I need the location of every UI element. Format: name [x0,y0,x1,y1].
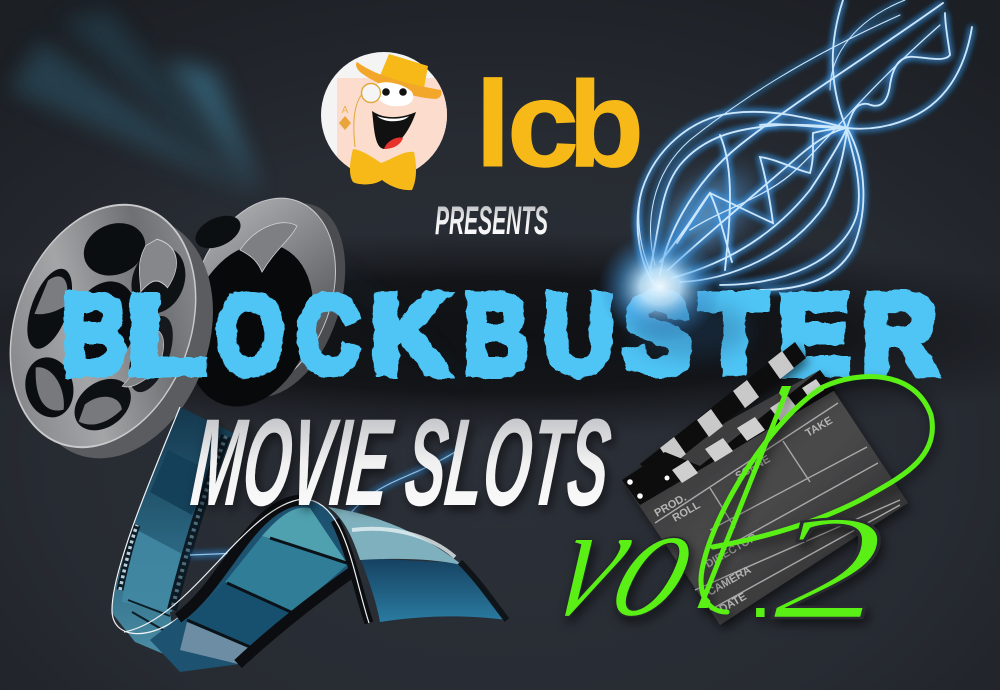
title: blockbuster: S [624,272,692,397]
film strip curled panel [360,558,507,622]
clapper labels: SCENE [734,453,772,483]
clapper labels: TAKE [804,415,835,440]
title: blockbuster: E [778,272,850,397]
title: blockbuster: C [297,272,359,397]
swirl source flare [598,231,750,358]
numeral 2: 2 [772,485,884,651]
clapper slate lines [655,403,900,610]
title: blockbuster [62,272,937,397]
clapper labels: DATE [718,591,749,616]
vol.2 green script [528,323,932,677]
clapper labels: DIRECTOR [704,532,759,571]
clapper labels [652,415,835,616]
title: blockbuster: B [464,272,529,397]
mascot badge [321,52,450,190]
letter l: l [669,323,815,677]
title: blockbuster: B [62,272,127,397]
clapper top arm [622,342,835,505]
card letter A: A [342,105,349,116]
clapper labels: PROD. [652,492,689,520]
title: blockbuster: U [544,272,614,397]
clapper labels: ROLL [670,499,703,525]
clapperboard [622,342,908,625]
film strip wave [124,499,507,672]
clapper labels: CAMERA [706,564,753,599]
title: blockbuster: T [701,272,767,397]
logo: lcb [321,52,644,192]
wordmark lcb: l [475,56,511,192]
front film reel [0,179,245,485]
letters v o: vo [528,469,730,652]
title: blockbuster: K [371,272,449,397]
title: blockbuster: R [862,272,937,397]
wordmark lcb: c [507,56,579,192]
blue light streak behind film [190,452,455,555]
back film reel [165,178,368,424]
film strip vertical loop [112,407,233,660]
bow tie [350,149,416,190]
projector light beams [10,10,480,400]
l swash loop [701,377,932,612]
presents label: PRESENTS [435,199,548,243]
title: blockbuster: O [216,272,284,397]
light trails energy swirl [638,0,972,290]
point: . [752,563,769,630]
swirl core haze [624,138,786,292]
wordmark lcb: b [568,56,644,192]
wordmark lcb [475,56,644,192]
title: blockbuster: L [127,272,206,397]
